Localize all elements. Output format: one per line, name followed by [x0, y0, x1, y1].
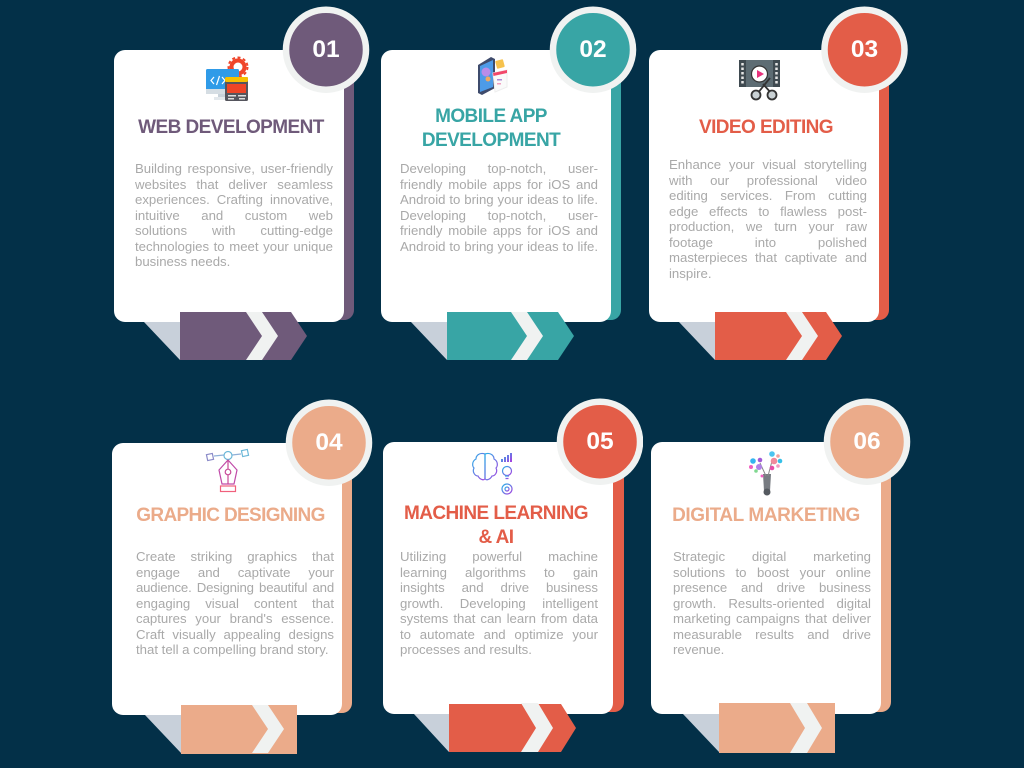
number: 03: 03 — [851, 36, 878, 63]
text: video editing: masterpieces that captivate and — [669, 250, 867, 265]
text: web development — [135, 161, 333, 269]
text: mobile app development: Developing top-notch, user- — [400, 208, 598, 222]
text: video editing: Enhance your visual storytelling — [669, 157, 867, 172]
text: graphic designing — [136, 549, 334, 657]
text: web development: technologies to meet your unique — [135, 238, 333, 254]
text: machine learning and AI: growth. Developing intelligent — [400, 596, 598, 610]
text: web development: business needs. — [135, 254, 230, 269]
panel: 02 mobile app development — [381, 6, 636, 360]
heading: machine learning and AI: & AI — [478, 527, 514, 548]
text: graphic designing: Create striking graphics that — [136, 549, 334, 564]
text: graphic designing: engaging visual content that — [136, 596, 334, 610]
text: web development: websites that deliver seamless — [135, 176, 333, 192]
text: digital marketing: presence and drive business — [673, 580, 871, 595]
text: web development: Building responsive, user-friendly — [135, 161, 333, 176]
text: graphic designing: captures your brand's essence. — [136, 611, 334, 626]
card shapes: 01 — [114, 6, 370, 360]
text: digital marketing: marketing campaigns that deliver — [673, 611, 871, 626]
text: video editing: footage into polished — [669, 234, 867, 250]
card shapes: 02 — [381, 6, 636, 360]
text: graphic designing: audience. Designing beautiful and — [136, 580, 334, 595]
icon: video editing — [739, 60, 780, 100]
text: machine learning and AI: systems that can learn from data — [400, 611, 598, 626]
icon: pen tool — [206, 449, 249, 492]
text: digital marketing: measurable results and drive — [673, 626, 871, 642]
heading: mobile app development: DEVELOPMENT — [422, 130, 560, 151]
heading: mobile app development: MOBILE APP — [435, 106, 547, 127]
heading: graphic designing: GRAPHIC DESIGNING — [136, 505, 325, 526]
card shapes: 05 — [383, 398, 643, 752]
panel: 06 digital marketing — [651, 398, 910, 753]
text: machine learning and AI: learning algorithms to gain — [400, 564, 598, 580]
text: digital marketing: solutions to boost your online — [673, 564, 871, 580]
card shapes: 04 — [112, 400, 372, 754]
panel: 01 web development — [114, 6, 370, 360]
text: mobile app development: Developing top-notch, user- — [400, 161, 598, 176]
heading: web development: WEB DEVELOPMENT — [138, 117, 324, 138]
text: machine learning and AI — [400, 549, 598, 657]
text: web development: solutions with cutting-edge — [135, 223, 333, 238]
text: mobile app development — [400, 161, 598, 254]
text: graphic designing: that tell a compelling brand story. — [136, 642, 329, 657]
text: web development: experiences. Crafting innovative, — [135, 192, 333, 207]
text: graphic designing: engage and captivate your — [136, 564, 334, 580]
panel: 04 graphic designing — [112, 400, 372, 754]
text: digital marketing — [673, 549, 871, 657]
icon: machine learning — [473, 453, 512, 494]
icon: mobile app — [478, 57, 507, 95]
text: digital marketing: growth. Results-oriented digital — [673, 596, 871, 610]
heading: machine learning and AI — [404, 503, 588, 548]
text: video editing: edge effects to flawless post- — [669, 204, 867, 218]
heading: digital marketing: DIGITAL MARKETING — [672, 505, 860, 526]
number: 06: 06 — [853, 428, 881, 455]
number: 04: 04 — [315, 429, 343, 456]
text: mobile app development: Android to bring your ideas to life. — [400, 238, 598, 254]
text: machine learning and AI: insights and drive business — [400, 580, 598, 595]
icon: web development — [206, 58, 248, 101]
text: video editing: production, we turn your raw — [669, 219, 867, 234]
text: machine learning and AI: Utilizing powerful machine — [400, 549, 598, 564]
text: machine learning and AI: processes and results. — [400, 642, 532, 657]
card shapes: 03 — [649, 6, 908, 360]
text: digital marketing: Strategic digital marketing — [673, 549, 871, 564]
icon: digital marketing tree — [749, 451, 782, 496]
text: mobile app development: friendly mobile apps for iOS and — [400, 223, 598, 238]
number: 05: 05 — [586, 428, 614, 455]
card shapes: 06 — [651, 398, 910, 753]
text: digital marketing: revenue. — [673, 642, 724, 657]
text: web development: intuitive and custom web — [135, 208, 333, 222]
panel: 03 video editing — [649, 6, 908, 360]
number: 01: 01 — [312, 36, 340, 63]
text: graphic designing: Craft visually appealing designs — [136, 626, 334, 642]
text: machine learning and AI: to automate and optimize your — [400, 626, 598, 642]
text: video editing — [669, 157, 867, 280]
number: 02: 02 — [579, 36, 607, 63]
heading: machine learning and AI: MACHINE LEARNING — [404, 503, 588, 524]
text: video editing: inspire. — [669, 266, 712, 280]
text: mobile app development: Android to bring your ideas to life. — [400, 192, 598, 207]
text: video editing: with our professional video — [669, 172, 867, 188]
heading: mobile app development — [422, 106, 561, 151]
text: video editing: editing services. From cutting — [669, 188, 867, 203]
text: mobile app development: friendly mobile apps for iOS and — [400, 176, 598, 192]
panel: 05 machine learning and AI — [383, 398, 643, 752]
heading: video editing: VIDEO EDITING — [699, 117, 833, 138]
